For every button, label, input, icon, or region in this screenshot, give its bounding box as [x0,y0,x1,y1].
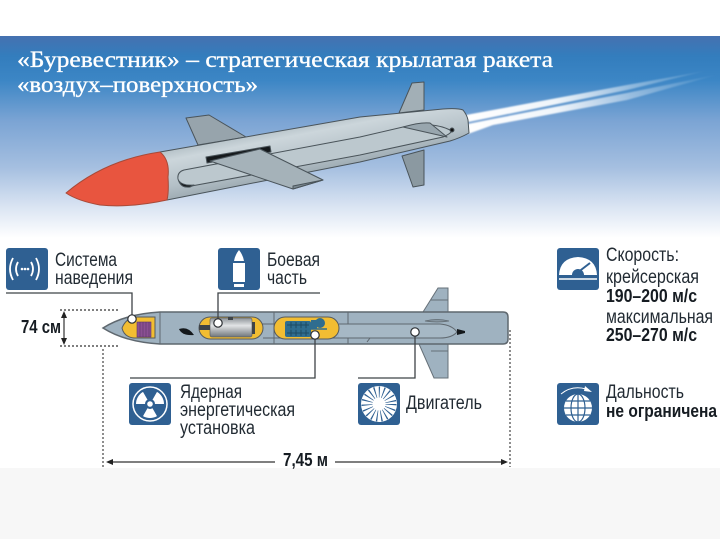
title: «воздух–поверхность» [17,72,258,97]
guidance block [137,322,151,337]
label: warhead [267,250,320,289]
length dimension [103,330,510,470]
upper tail fin [399,82,424,113]
label: warhead: часть [267,268,307,289]
label: reactor [180,382,295,439]
label: reactor: Ядерная [180,382,242,403]
text: speed: 190–200 м/с [606,286,697,306]
icon: warhead [218,248,260,290]
text: speed: крейсерская [606,267,699,288]
illustration: cruise missile [66,82,469,206]
label: engine: Двигатель [406,393,482,414]
rear small fin [403,123,447,137]
reactor compartment [274,317,339,339]
schematic body [103,312,508,344]
intake [179,328,194,335]
wing slot [206,146,271,163]
icon: radiation [129,383,171,425]
warhead compartment [199,317,263,339]
schematic missile [103,288,508,378]
nozzle [450,128,454,132]
text: range: Дальность [606,382,684,403]
text: range [606,382,718,421]
label: guidance [55,250,133,289]
rear upper fin [423,288,448,312]
label: guidance: Система [55,250,117,271]
label: reactor: установка [180,418,255,439]
rear lower fin [419,344,448,378]
label: warhead: Боевая [267,250,320,271]
label: guidance: наведения [55,268,133,289]
icon: turbine [358,383,400,425]
main wing [210,149,323,189]
diameter dimension [21,310,119,346]
text: speed: Скорость: [606,245,679,266]
lower tail fin [402,150,424,187]
fuselage [160,109,469,200]
leader lines [6,293,415,378]
length dimension: 7,45 м [283,450,328,470]
leader dots [128,315,419,339]
title: «Буревестник» – стратегическая крылатая ракета [17,47,553,72]
red nose cone [66,152,168,206]
bottom band [0,468,720,539]
text: speed [606,245,713,345]
icon: speedometer [557,248,599,290]
label: reactor: энергетическая [180,400,295,421]
title [17,47,553,97]
exhaust plume [466,71,720,134]
icon: globe [557,383,599,425]
far wing [186,115,246,145]
warhead cylinder [210,318,252,337]
icon: guidance signal [6,248,48,290]
engine duct [339,324,457,338]
side duct [178,125,452,187]
nozzle [457,329,465,335]
sky background [0,36,720,238]
guidance compartment [122,317,155,338]
diameter dimension: 74 см [21,317,61,337]
reactor block [285,318,327,337]
text: speed: 250–270 м/с [606,325,697,345]
duct intake [179,181,194,187]
